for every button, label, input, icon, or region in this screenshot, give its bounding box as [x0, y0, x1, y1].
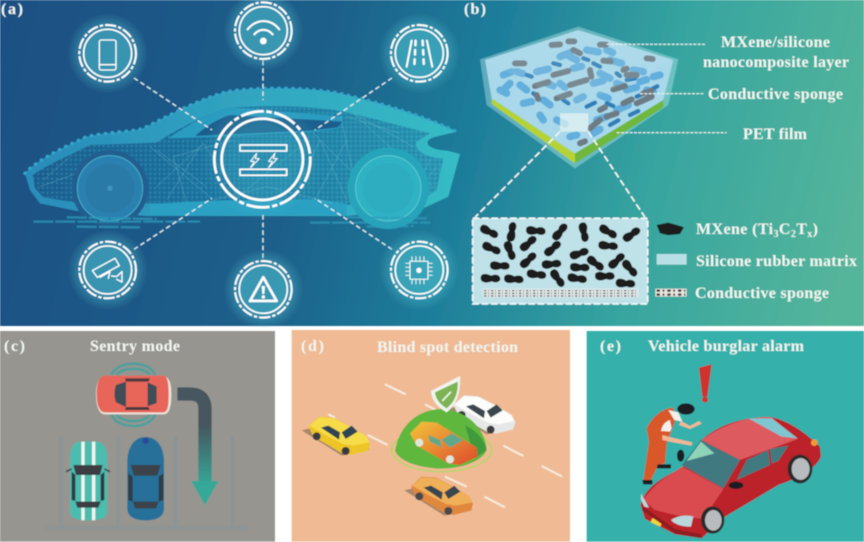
- label (b): (b): [464, 1, 486, 18]
- label: nanocomposite layer: MXene/silicone: [721, 34, 830, 51]
- teal parked car: [66, 442, 110, 520]
- legend text: MXene: ): [813, 221, 818, 238]
- legend text: MXene: x: [807, 229, 812, 240]
- legend: silicone swatch: [657, 254, 687, 265]
- panel d: blind spot detection: [292, 330, 570, 542]
- icon: chip: [379, 230, 459, 310]
- inset: composite cross-section: [473, 218, 648, 304]
- panel: (a)(b) gradient background: [0, 0, 864, 326]
- zoom-in dashed lines: [475, 132, 645, 217]
- red car: [641, 417, 821, 538]
- red car: [96, 376, 171, 414]
- yellow car: [302, 417, 370, 456]
- rear-left wheel: [72, 150, 148, 227]
- panel c: sentry mode: [0, 331, 275, 542]
- label (a): (a): [1, 1, 23, 18]
- legend text: MXene: MXene (Ti: [696, 221, 773, 238]
- road dashes: [328, 384, 562, 507]
- panel b: sensor structure: [473, 27, 727, 304]
- label (e): (e): [600, 338, 621, 355]
- legend text: MXene: 2: [791, 229, 796, 240]
- label: nanocomposite layer line 2: nanocomposite layer: [703, 54, 849, 71]
- label (c): (c): [4, 338, 25, 355]
- legend: MXene swatch: [657, 223, 684, 235]
- title: blind spot detection: Blind spot detection: [377, 339, 518, 356]
- icon: road: [379, 13, 459, 93]
- legend text: MXene: 3: [773, 229, 778, 240]
- 3D layered block: [480, 27, 678, 168]
- right wheel: [348, 148, 429, 229]
- legend text: sponge: Conductive sponge: [695, 285, 829, 302]
- legend text: MXene: T: [796, 221, 807, 238]
- icon: phone: [68, 13, 148, 93]
- icon: warning triangle: [223, 249, 303, 329]
- exclamation mark: [699, 364, 712, 403]
- sensor waves: [112, 364, 155, 426]
- blue parked car: [127, 437, 164, 520]
- orange car: [404, 477, 473, 516]
- green detection dome: [392, 409, 492, 472]
- label: conductive sponge: Conductive sponge: [708, 86, 843, 103]
- white car: [447, 395, 515, 434]
- icon: central pressure sensor: [201, 98, 324, 221]
- panel e: vehicle burglar alarm: [587, 331, 864, 542]
- label (d): (d): [301, 338, 324, 355]
- shield icon: [431, 376, 460, 412]
- label: PET film: PET film: [743, 126, 808, 143]
- title: vehicle burglar alarm: Vehicle burglar alarm: [648, 338, 805, 355]
- parking bays: [46, 436, 248, 528]
- magnified selection: [560, 113, 588, 132]
- title: sentry mode: Sentry mode: [90, 338, 180, 355]
- connector lines: [134, 61, 392, 258]
- arrow: [177, 394, 218, 505]
- protected car: [410, 422, 478, 465]
- legend text: silicone: Silicone rubber matrix: [696, 253, 857, 270]
- legend text: MXene: C: [779, 221, 790, 238]
- man in overalls: [642, 403, 702, 484]
- panel a: smart car sensing network: [25, 0, 460, 329]
- car silhouette: [25, 88, 460, 229]
- icon: security camera: [68, 230, 148, 310]
- leader lines: [607, 44, 727, 133]
- icon: wifi: [223, 0, 303, 71]
- legend: sponge swatch: [655, 289, 687, 297]
